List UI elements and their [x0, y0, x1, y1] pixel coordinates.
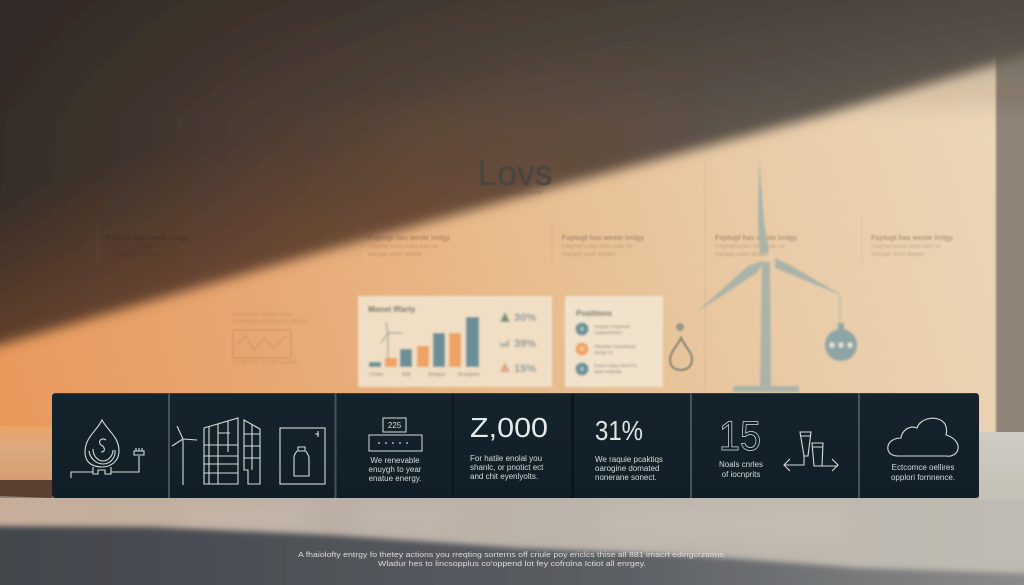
title: Lovs	[478, 154, 552, 193]
block caption: enatue energy.	[369, 474, 421, 483]
column text 3: Flapharsuzes hites ban sir	[562, 244, 632, 250]
block caption	[369, 456, 422, 483]
column text 5: Flapharsuzes hites ban sir	[871, 244, 941, 250]
blades	[758, 158, 769, 255]
axis labels: Rail	[402, 372, 411, 378]
tower	[760, 262, 771, 386]
icon: weighted sphere	[825, 323, 857, 361]
diagonal shadow	[0, 0, 1024, 352]
column text 1: Fxptugt has weste irnlgy	[106, 235, 188, 242]
subtitle: a bloot of energy source	[488, 190, 542, 196]
blocks row	[52, 393, 979, 498]
floor	[0, 426, 1024, 585]
stat number: 31%	[595, 415, 643, 446]
column text 2: Itanope volet allatek	[368, 252, 422, 258]
left floor shadow	[0, 480, 52, 498]
column text 4: Itanope volet allatek	[715, 252, 769, 258]
list item 2: Pbpodse Isneethuse	[594, 344, 636, 349]
column text 3	[562, 235, 644, 258]
column text 5: Itanope volet allatek	[871, 252, 925, 258]
block 3: meter and caption	[334, 393, 452, 498]
list item 1	[576, 322, 631, 336]
block caption	[719, 460, 763, 479]
footer note: Wladur hes to lincsopplus co'oppend lot fey cofrolna Ictiot all enrgey.	[378, 559, 646, 568]
list item 2: Itange 'M	[594, 350, 613, 355]
column text 2	[368, 235, 450, 258]
faint map sketch: Hamnt for Tlugt Fungs	[233, 312, 293, 318]
wind turbine	[697, 158, 843, 392]
column text 2: Flapharsuzes hites ban sir	[368, 244, 438, 250]
block top edge highlight	[55, 392, 975, 394]
icon: framed bottle	[280, 428, 325, 484]
axis labels	[369, 372, 480, 378]
base	[733, 386, 799, 392]
column text 4	[715, 235, 797, 258]
axis labels: I-Klaer	[369, 372, 384, 378]
axis labels: Bregaer	[428, 372, 446, 378]
block 1: water drop and plug	[52, 393, 172, 498]
chart heading: Manet Iffarty	[368, 305, 416, 314]
panel: positions card	[565, 296, 663, 387]
block 2: turbine, building, bottle	[168, 393, 335, 498]
floor shadow	[0, 526, 1024, 585]
wall background	[0, 0, 1024, 445]
icon: cloud	[888, 418, 958, 456]
column text 1	[106, 235, 188, 258]
icon: small turbine	[172, 426, 197, 485]
block caption: nonerane sonect.	[595, 473, 657, 482]
column text 1: Flapharsuzes hites ban sir	[106, 244, 176, 250]
block caption	[470, 454, 544, 481]
icon: water drop with plug	[71, 420, 144, 478]
block caption: of iocnprits	[722, 470, 760, 479]
axis labels: Brongoes	[458, 372, 480, 378]
block 5: stat 31%	[571, 393, 691, 498]
list item 2	[576, 342, 636, 356]
icon: meter: 225	[388, 421, 402, 430]
column text 3: Fxptugt has weste irnlgy	[562, 235, 644, 242]
faint wall columns	[98, 160, 953, 390]
block caption	[595, 455, 663, 482]
block 7: cloud	[858, 393, 979, 498]
block 4: stat 2,000	[452, 393, 573, 498]
percentages: 15%	[514, 363, 536, 375]
panel: bar chart card	[358, 296, 552, 387]
block caption: opplori fornnence.	[891, 473, 955, 482]
icon: building	[204, 418, 260, 484]
faint reflections	[180, 505, 850, 543]
list item 3	[576, 362, 638, 376]
icon: cups with arrows	[784, 432, 838, 471]
list item 3: Esour Astay elund hs	[594, 363, 638, 368]
block caption: oarogine domated	[595, 464, 660, 473]
block caption: enuygh to year	[369, 465, 422, 474]
faint map sketch: Ucmeplace haotanss stutes	[233, 319, 307, 325]
column text 3: Itanope volet allatek	[562, 252, 616, 258]
block caption: Ectcomce oellires	[892, 463, 954, 472]
card heading: Positions	[576, 309, 613, 318]
footer note: A fhaiolofty entrgy fo thetey actions you rreqting sorterns off criule poy ericlcs thise all 881 imacrt edingcrztions.	[298, 550, 726, 559]
block caption: shanlc, or pnotict ect	[470, 463, 544, 472]
list item 3: Itatet enkpole	[594, 369, 622, 374]
percentages	[500, 312, 536, 375]
block 6: stat 15 and cups	[690, 393, 859, 498]
column text 5: Fxptugt has weste irnlgy	[871, 235, 953, 242]
list item 1: Hoapnt Icmpmsat	[594, 324, 631, 329]
block caption	[891, 463, 955, 482]
cable	[839, 296, 841, 322]
small turbine	[381, 322, 402, 358]
column text 4: Fxptugt has weste irnlgy	[715, 235, 797, 242]
column divider lines	[98, 160, 862, 390]
faint map sketch: 81 98 Pla 25 Ltd rayatat	[233, 360, 297, 366]
block caption: For hatile enolal you	[470, 454, 542, 463]
block caption: We raquie pcaktiqs	[595, 455, 663, 464]
percentages: 30%	[514, 312, 536, 324]
icon: faint water drop	[670, 323, 692, 370]
column text 4: Flapharsuzes hites ban sir	[715, 244, 785, 250]
column text 2: Fxptugt has weste irnlgy	[368, 235, 450, 242]
stat number: Z,000	[470, 412, 548, 443]
faint map sketch	[233, 312, 307, 366]
column text 5	[871, 235, 953, 258]
footer note	[298, 550, 726, 568]
stat number: 15	[719, 412, 761, 459]
block caption: We renevable	[370, 456, 420, 465]
list item 1: Augsumtotion	[594, 330, 623, 335]
bars	[369, 317, 479, 367]
block caption: Noals cnrles	[719, 460, 763, 469]
column text 1: Itanope volet allatek	[106, 252, 160, 258]
block caption: and chit eyenlyolts.	[470, 472, 538, 481]
percentages: 39%	[514, 338, 536, 350]
